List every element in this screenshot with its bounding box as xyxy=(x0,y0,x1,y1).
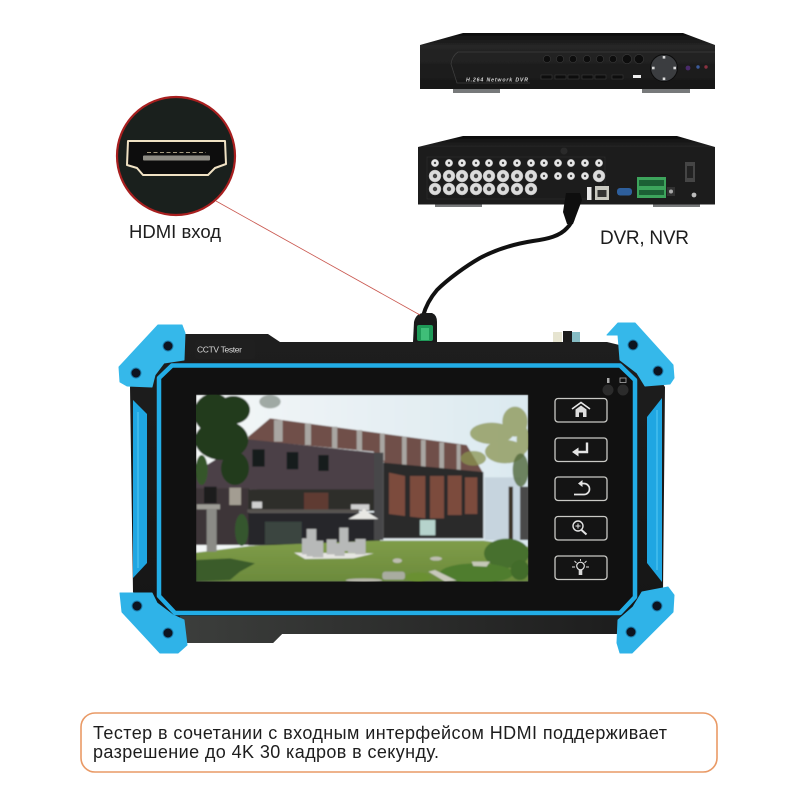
building dark wall xyxy=(196,439,375,492)
CCTV Tester badge: CCTV Tester xyxy=(197,344,242,354)
label: DVR, NVR: DVR, NVR xyxy=(600,228,689,249)
button: home xyxy=(555,398,607,422)
umbrella xyxy=(348,508,378,519)
DVR navigation dial xyxy=(650,54,678,82)
HDMI cable xyxy=(423,193,582,316)
left pillar xyxy=(207,509,217,552)
screen photo xyxy=(194,393,530,583)
building right wing xyxy=(383,463,483,538)
status indicators xyxy=(602,378,628,396)
rear ports xyxy=(587,162,696,200)
left tree xyxy=(194,393,250,485)
button: brightness xyxy=(555,556,607,580)
DVR model label: H.264 Network DVR xyxy=(466,78,528,84)
pointer line from HDMI circle to plug xyxy=(216,201,420,315)
stones xyxy=(393,558,402,563)
button: enter xyxy=(555,438,607,462)
white building xyxy=(485,477,521,540)
DVR front buttons xyxy=(541,54,644,79)
HDMI port close-up circle xyxy=(117,97,235,215)
device body xyxy=(119,313,674,653)
corner guard bottom right xyxy=(617,587,674,653)
BNC connectors large rows xyxy=(429,170,605,195)
right tree xyxy=(461,407,530,466)
left grip xyxy=(133,400,147,578)
DVR rear panel xyxy=(418,136,715,207)
top connector parts xyxy=(553,331,580,342)
HDMI port outline xyxy=(127,141,226,175)
bottom bezel strip xyxy=(180,616,625,643)
sculpture xyxy=(294,553,374,559)
caption text: Тестер в сочетании с входным интерфейсом HDMI поддерживает xyxy=(93,723,667,743)
BNC connectors small row xyxy=(431,159,603,180)
cable plug in DVR xyxy=(563,193,582,224)
corner guard bottom left xyxy=(120,593,187,653)
lawn xyxy=(196,541,528,582)
corner guard top right xyxy=(607,323,674,386)
CCTV Tester badge xyxy=(195,339,255,359)
building upper band xyxy=(248,418,483,473)
label: HDMI вход: HDMI вход xyxy=(129,221,221,242)
screen bezel with blue outline xyxy=(159,366,635,613)
HDMI plug on device xyxy=(413,313,437,342)
caption text: разрешение до 4K 30 кадров в секунду. xyxy=(93,742,439,762)
caption text xyxy=(93,723,667,762)
bushes xyxy=(484,539,529,568)
DVR front panel xyxy=(420,33,715,93)
right grip xyxy=(647,398,662,582)
corner guard top left xyxy=(119,325,185,387)
button: back xyxy=(555,477,607,500)
button: zoom xyxy=(555,516,607,540)
caption box xyxy=(81,713,717,772)
